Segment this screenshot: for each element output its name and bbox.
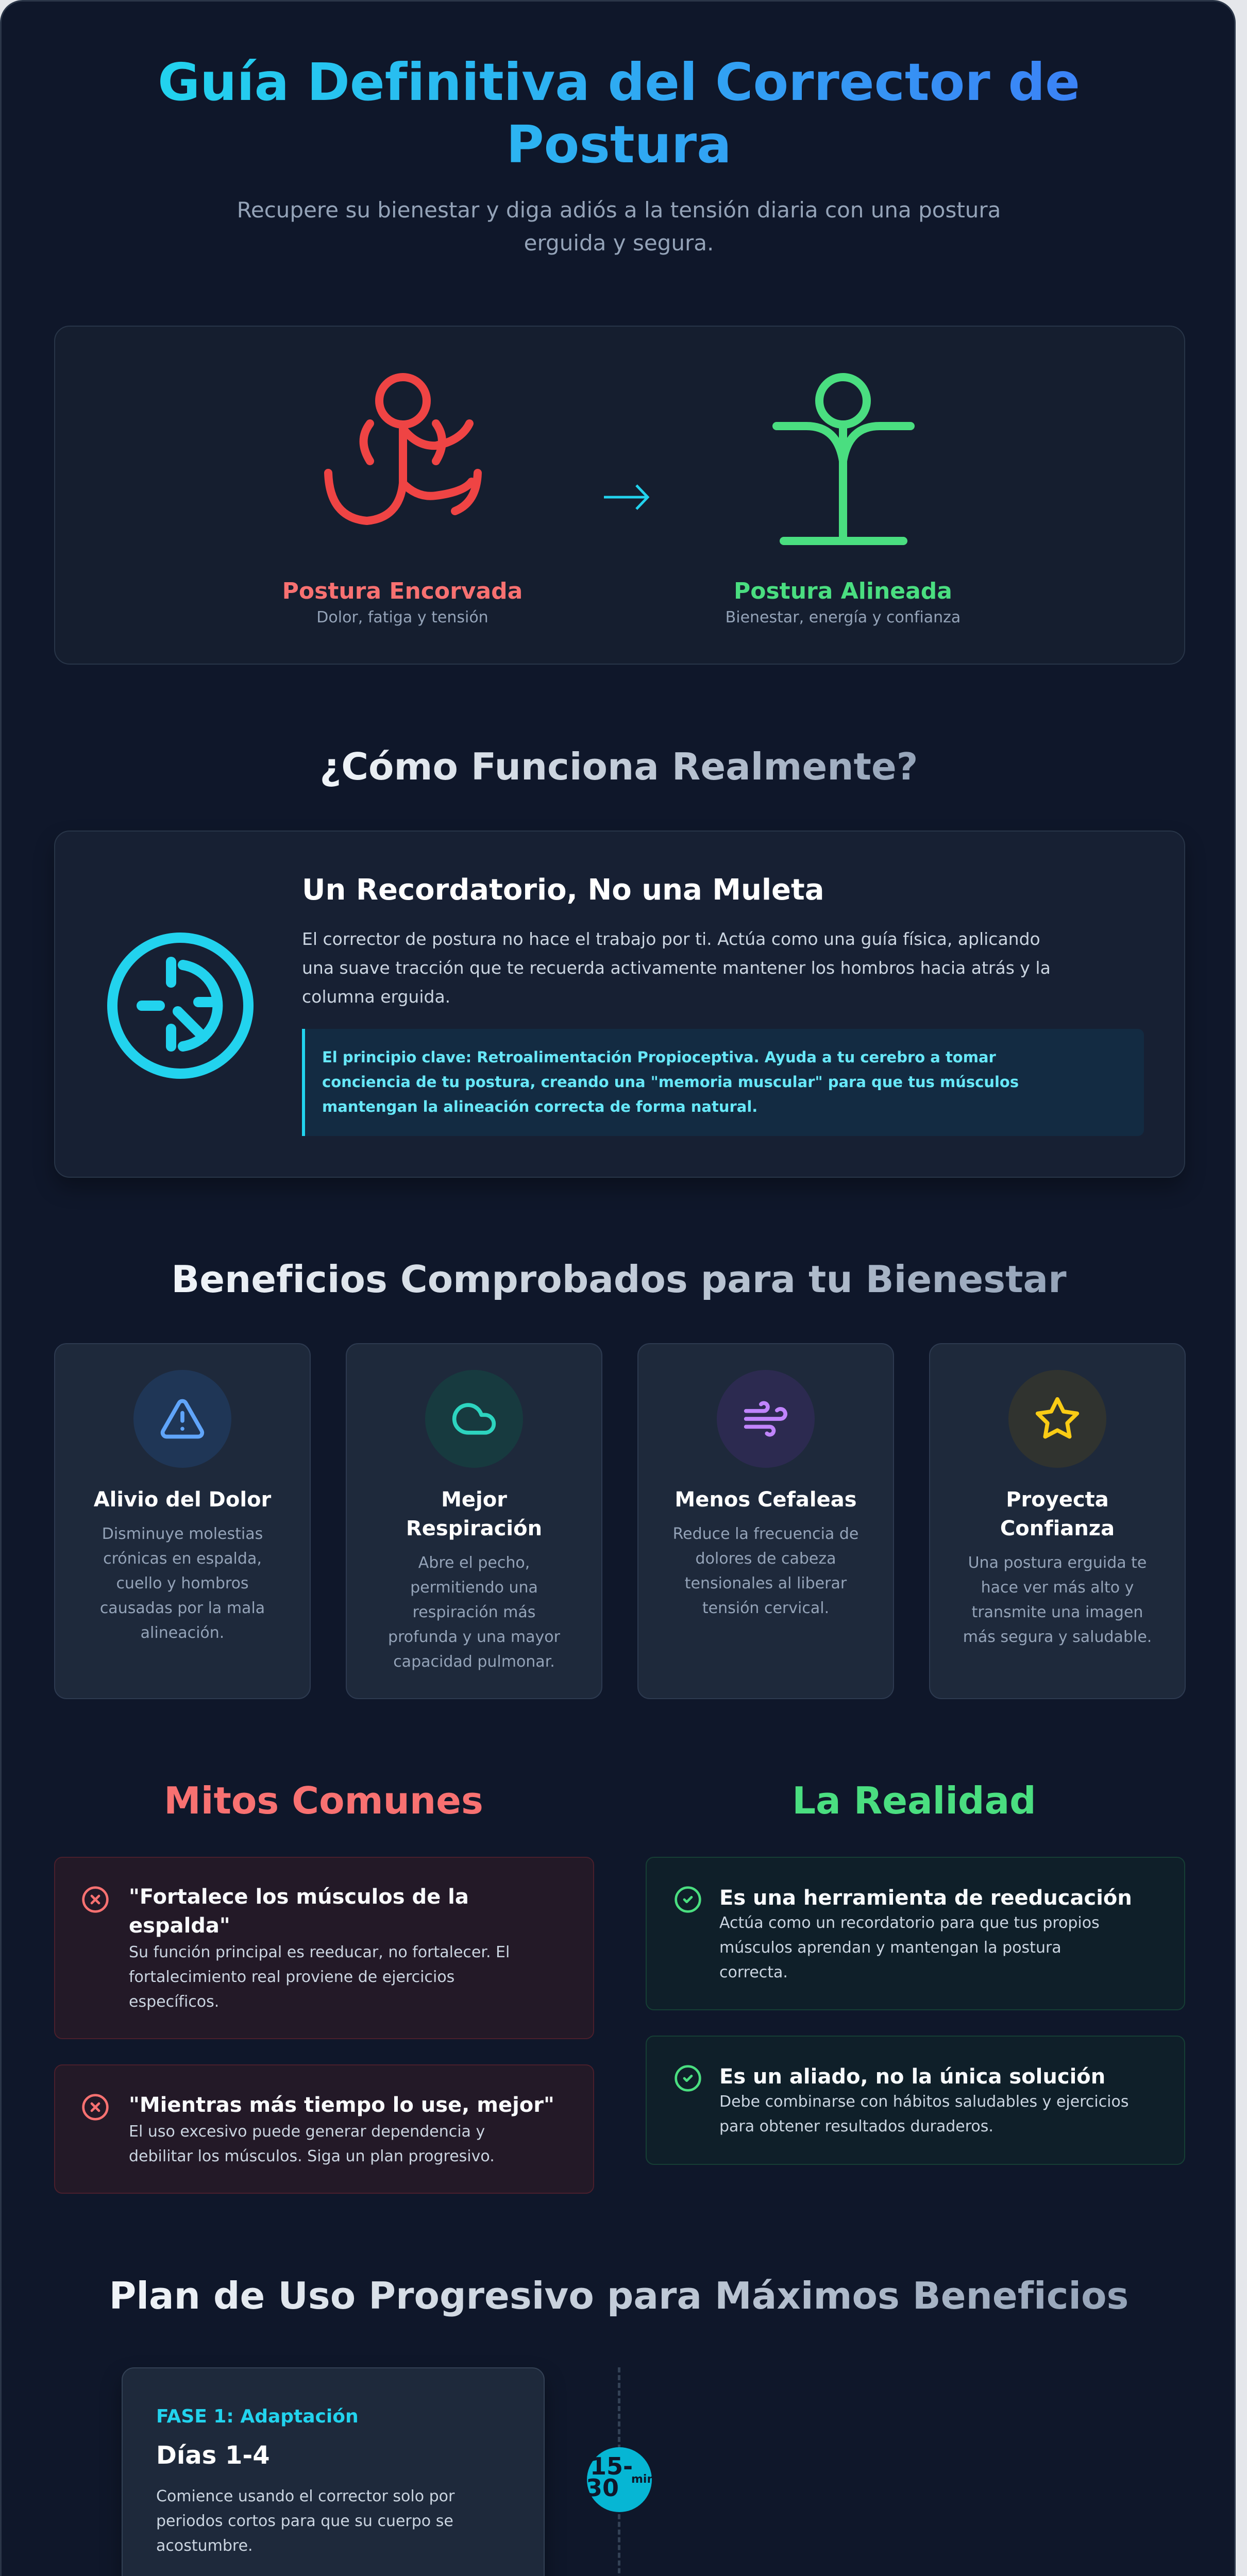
icon: slouched figure (328, 377, 478, 521)
reality card 1 (646, 1857, 1185, 2010)
myth card 2 (54, 2064, 594, 2194)
myth card 2: debilitar los músculos. Siga un plan progresivo. (129, 2147, 495, 2165)
timeline marker 1: 30 (586, 2474, 619, 2502)
icon: aligned figure (777, 377, 911, 541)
label: aligned: Postura Alineada (734, 578, 952, 604)
myth card 1: "Fortalece los músculos de la (129, 1885, 469, 1909)
label: slouched (282, 578, 523, 626)
subtitle: erguida y segura. (524, 230, 714, 256)
card: pain relief: Alivio del Dolor (94, 1488, 271, 1512)
card: breathing: Respiración (406, 1517, 542, 1540)
title (158, 52, 1080, 175)
icon: cloud (425, 1370, 523, 1468)
card: breathing: permitiendo una (410, 1579, 538, 1597)
myth card 1: específicos. (129, 1993, 219, 2011)
card: breathing: respiración más (413, 1603, 535, 1621)
timeline marker 1 (587, 2447, 652, 2512)
myth card 2: "Mientras más tiempo lo use, mejor" (129, 2093, 554, 2117)
title: Guía Definitiva del Corrector de (158, 52, 1080, 112)
reality card 2 (646, 2036, 1185, 2165)
heading: reality: La Realidad (792, 1779, 1036, 1822)
timeline marker 1: min (631, 2473, 655, 2486)
label: aligned: Bienestar, energía y confianza (726, 608, 960, 626)
card: breathing: Mejor (441, 1488, 507, 1512)
label: slouched: Postura Encorvada (282, 578, 523, 604)
icon: check (675, 2065, 701, 2092)
card: pain relief: crónicas en espalda, (103, 1550, 262, 1568)
reality card 1: correcta. (719, 1963, 788, 1981)
body text: El corrector de postura no hace el trabajo por ti. Actúa como una guía física, aplicando (302, 929, 1040, 949)
myth card 1: fortalecimiento real proviene de ejercicios (129, 1968, 454, 1986)
arrow (604, 485, 648, 509)
title: Postura (506, 114, 732, 175)
reality card 2: para obtener resultados duraderos. (719, 2117, 993, 2136)
card: breathing: Abre el pecho, (418, 1554, 530, 1572)
reality card 2: Debe combinarse con hábitos saludables y ejercicios (719, 2093, 1129, 2111)
card: pain relief: cuello y hombros (116, 1574, 249, 1592)
body text: columna erguida. (302, 987, 450, 1007)
phase 1 card: periodos cortos para que su cuerpo se (156, 2512, 453, 2530)
panel: how it works (54, 831, 1185, 1178)
icon: star (1008, 1370, 1106, 1468)
card: confidence: más segura y saludable. (963, 1628, 1152, 1646)
reality card 1: músculos aprendan y mantengan la postura (719, 1939, 1061, 1957)
card: headaches: tensionales al liberar (685, 1574, 847, 1592)
card: headaches: Menos Cefaleas (675, 1488, 857, 1512)
card: breathing: capacidad pulmonar. (393, 1653, 555, 1671)
callout: key principle: conciencia de tu postura, creando una "memoria muscular" para que tus músculos (322, 1073, 1019, 1091)
card: headaches: Reduce la frecuencia de (673, 1525, 858, 1543)
icon: wind (717, 1370, 815, 1468)
heading: benefits: Beneficios Comprobados para tu Bienestar (171, 1258, 1067, 1301)
card: headaches (637, 1343, 894, 1699)
reality card 1: Es una herramienta de reeducación (719, 1886, 1132, 1910)
icon: x (82, 1886, 109, 1913)
callout: key principle (302, 1029, 1144, 1136)
card: confidence: Confianza (1000, 1517, 1115, 1540)
phase 1 card: FASE 1: Adaptación (156, 2406, 359, 2427)
heading: how it works: ¿Cómo Funciona Realmente? (319, 745, 918, 788)
card: confidence: Proyecta (1006, 1488, 1109, 1512)
myth card 1 (54, 1857, 594, 2039)
figures and arrow (324, 373, 915, 545)
card: breathing: profunda y una mayor (388, 1628, 560, 1646)
phase 1 card (122, 2367, 545, 2576)
subtitle: Recupere su bienestar y diga adiós a la tensión diaria con una postura (237, 197, 1001, 223)
card: headaches: tensión cervical. (702, 1599, 829, 1617)
card: breathing (346, 1343, 602, 1699)
phase 1 card: acostumbre. (156, 2537, 253, 2555)
panel: posture comparison (54, 326, 1185, 665)
timeline marker 1: 15- (590, 2452, 633, 2480)
icon: x (82, 2094, 109, 2121)
card: pain relief: causadas por la mala (100, 1599, 265, 1617)
card: pain relief: Disminuye molestias (102, 1525, 263, 1543)
callout: key principle: El principio clave: Retroalimentación Propioceptiva. Ayuda a tu cerebro a tomar (322, 1048, 996, 1066)
card: confidence: Una postura erguida te (968, 1554, 1147, 1572)
body text (302, 929, 1051, 1007)
body text: una suave tracción que te recuerda activamente mantener los hombros hacia atrás y la (302, 958, 1051, 978)
icon: check (675, 1886, 701, 1913)
heading: plan: Plan de Uso Progresivo para Máximos Beneficios (109, 2274, 1128, 2317)
label: slouched: Dolor, fatiga y tensión (316, 608, 488, 626)
card: confidence: transmite una imagen (972, 1603, 1143, 1621)
card: pain relief (54, 1343, 311, 1699)
heading: myths: Mitos Comunes (164, 1779, 483, 1822)
label: aligned (726, 578, 960, 626)
reality card 1: Actúa como un recordatorio para que tus propios (719, 1914, 1100, 1932)
icon: posture target (107, 933, 254, 1079)
card: confidence (929, 1343, 1186, 1699)
timeline line (618, 2367, 620, 2576)
callout: key principle: mantengan la alineación correcta de forma natural. (322, 1098, 757, 1115)
myth card 2: El uso excesivo puede generar dependencia y (129, 2123, 485, 2141)
phase 1 card: Comience usando el corrector solo por (156, 2487, 454, 2505)
myth card 1: Su función principal es reeducar, no fortalecer. El (129, 1943, 510, 1961)
heading: reminder: Un Recordatorio, No una Muleta (302, 873, 824, 907)
card: pain relief: alineación. (141, 1624, 224, 1642)
phase 1 card: Días 1-4 (156, 2441, 270, 2470)
card: confidence: hace ver más alto y (981, 1579, 1134, 1597)
subtitle (237, 197, 1001, 256)
icon: warning (133, 1370, 231, 1468)
myth card 1: espalda" (129, 1914, 230, 1938)
card: headaches: dolores de cabeza (696, 1550, 836, 1568)
reality card 2: Es un aliado, no la única solución (719, 2065, 1105, 2089)
